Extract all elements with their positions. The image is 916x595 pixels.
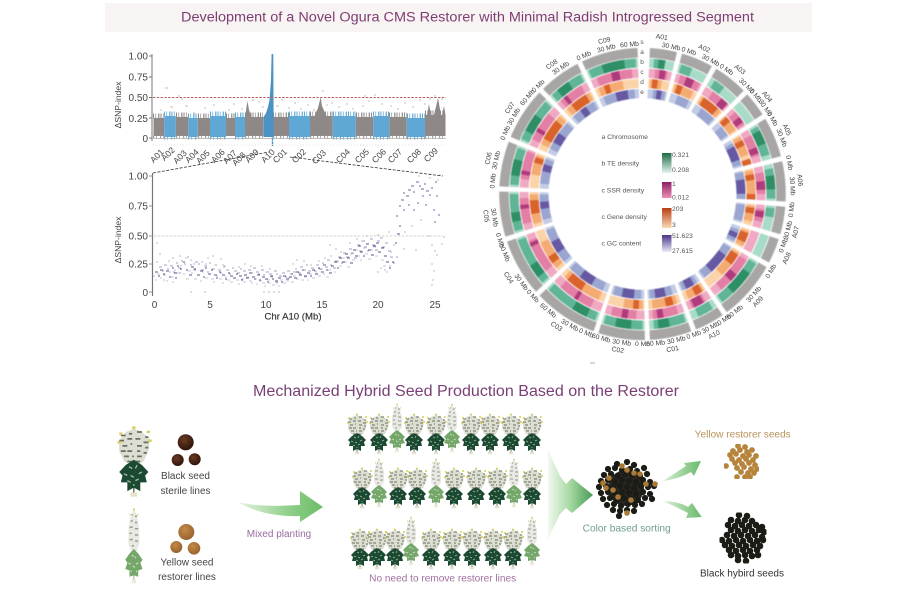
chromosome scale labels: 30 Mb <box>489 208 499 228</box>
track letters: s <box>640 39 644 46</box>
y axis title: ΔSNP-index <box>113 81 123 128</box>
chromosome scale labels: C06 <box>484 151 494 165</box>
chromosome labels: A03 <box>171 148 189 166</box>
chromosome scale labels: C08 <box>545 58 559 71</box>
chromosome labels: A08 <box>230 150 248 168</box>
chromosome scale labels: 30 Mb <box>745 285 763 304</box>
track letters: c <box>640 69 644 76</box>
icon: mixed seed pile <box>599 462 655 516</box>
label: black hybrid seeds: Black hybird seeds <box>700 569 784 580</box>
track a: chromosomes <box>504 53 781 335</box>
upper cluster points <box>396 182 440 222</box>
chromosome scale labels: 0 Mb <box>718 63 734 77</box>
track e: GC content <box>544 94 741 294</box>
x axis tick labels: 10 <box>260 300 272 311</box>
chromosome labels: C01 <box>271 147 289 165</box>
title band: Development of a Novel Ogura CMS Restorer with Minimal Radish Introgressed Segment <box>181 10 754 26</box>
chromosome scale labels: 0 Mb <box>525 289 540 305</box>
icon: sterile plant <box>118 428 152 495</box>
icon: yellow seeds <box>170 524 200 555</box>
chromosome labels: A04 <box>183 147 201 165</box>
y axis tick labels: 1.00 <box>129 52 148 62</box>
y axis tick labels: 1.00 <box>129 172 148 182</box>
circos colour scales: 1 <box>672 181 676 188</box>
chromosome gaps <box>524 73 762 315</box>
x axis tick labels: 20 <box>372 300 384 311</box>
x axis tick labels: 5 <box>207 300 213 311</box>
y axis tick labels: 0.50 <box>129 93 148 104</box>
chromosome scale labels: 30 Mb <box>788 177 796 196</box>
chromosome scale labels: 0 Mb <box>778 237 790 254</box>
blue chromosome bands <box>164 116 425 137</box>
chromosome scale labels: 30 Mb <box>596 43 617 55</box>
parent: black seed sterile line <box>118 428 211 497</box>
fuzzy band edges <box>153 113 445 116</box>
scattered outlier points <box>160 88 443 113</box>
light scatter points <box>156 175 445 292</box>
chromosome labels: A02 <box>159 145 177 163</box>
track c: SSR density <box>524 73 761 315</box>
chromosome scale labels: A01 <box>655 33 668 42</box>
chromosome scale labels: 30 Mb <box>491 150 502 170</box>
chromosome scale labels: 30 Mb <box>512 273 529 292</box>
circos track legend: a Chromosome <box>602 134 648 141</box>
chromosome scale labels: 0 Mb <box>500 125 512 142</box>
x axis title: Chr A10 (Mb) <box>264 312 322 322</box>
chromosome scale labels: 0 Mb <box>748 88 763 104</box>
y axis tick labels <box>129 52 148 145</box>
y axis tick labels: 0.50 <box>129 232 148 242</box>
label: color based sorting: Color based sorting <box>583 524 671 535</box>
chromosome scale labels: 30 Mb <box>506 107 522 127</box>
chromosome labels: C04 <box>334 147 352 165</box>
plant row 1 <box>347 404 543 453</box>
chromosome scale labels: 0 Mb <box>788 202 796 218</box>
y axis tick labels: 0 <box>142 134 148 145</box>
label: black seed sterile lines <box>160 471 211 497</box>
chromosome scale labels: 60 Mb <box>646 340 666 348</box>
icon: yellow seed pile <box>726 446 757 477</box>
track letters <box>640 39 644 96</box>
circos track legend: c SSR density <box>602 188 645 194</box>
chromosome scale labels: A09 <box>752 295 765 309</box>
chromosome scale labels: 0 Mb <box>494 232 505 249</box>
y axis tick labels <box>129 172 148 299</box>
chromosome scale labels: 0 Mb <box>531 79 547 94</box>
chromosome scale labels: A10 <box>707 329 722 341</box>
title band <box>105 3 812 32</box>
chromosome A10 SNP-index plot <box>113 172 445 322</box>
chromosome labels: A10 <box>259 147 277 165</box>
x axis tick labels: 0 <box>152 300 158 311</box>
icon: black seeds <box>172 434 201 466</box>
chromosome scale labels: 0 Mb <box>489 173 498 189</box>
chromosome scale labels: 0 Mb <box>578 327 595 340</box>
circos track legend: b TE density <box>602 160 640 168</box>
chromosome scale labels: 30 Mb <box>757 99 773 118</box>
circos track legend <box>602 134 648 248</box>
chromosome scale labels: 30 Mb <box>774 128 788 148</box>
field of mixed plants <box>347 404 543 568</box>
chromosome labels: C02 <box>290 147 308 165</box>
circos colour scales: 51.623 <box>672 233 693 240</box>
genome-wide SNP-index Manhattan plot <box>113 52 446 168</box>
chromosome scale labels: 30 Mb <box>612 338 632 348</box>
chromosome scale labels: 60 Mb <box>519 88 537 107</box>
label: yellow seed restorer lines: restorer lines <box>158 572 216 583</box>
circos colour scales: 0.012 <box>672 194 689 202</box>
chromosome scale labels: 0 Mb <box>716 313 733 327</box>
chromosome labels: A01 <box>148 147 166 165</box>
chromosome scale labels: 0 Mb <box>680 46 697 58</box>
chromosome scale labels: 30 Mb <box>551 60 571 77</box>
plant row 2 <box>352 459 543 507</box>
chromosome scale labels: 60 Mb <box>620 41 639 49</box>
chromosome scale labels: 60 Mb <box>497 243 511 263</box>
track letters: a <box>640 49 644 56</box>
circos colour scales: 0.321 <box>672 152 689 159</box>
y axis tick labels: 0 <box>142 288 148 299</box>
chromosome scale labels: C01 <box>666 345 680 354</box>
arrow: to yellow seeds <box>663 461 701 481</box>
arrow: to mixed planting <box>238 491 323 522</box>
chromosome labels: A07 <box>221 148 239 166</box>
chromosome scale labels: 30 Mb <box>737 77 756 96</box>
label: black seed sterile lines: Black seed <box>161 471 210 482</box>
chromosome scale labels: 0 Mb <box>576 50 593 63</box>
dark scatter points <box>152 226 401 286</box>
chromosome scale labels <box>481 33 803 355</box>
parent: yellow seed restorer line <box>125 509 216 583</box>
chromosome scale labels: C03 <box>549 321 563 333</box>
track d: gene density <box>534 83 751 305</box>
y axis tick labels: 0.25 <box>129 114 148 125</box>
chromosome labels: C09 <box>422 146 440 164</box>
y axis title: ΔSNP-index <box>113 216 123 263</box>
label: yellow restorer seeds: Yellow restorer seeds <box>695 430 791 441</box>
chromosome scale labels: 30 Mb <box>666 335 687 346</box>
track b: TE density <box>514 63 771 325</box>
chromosome scale labels: 0 Mb <box>765 111 779 128</box>
icon: restorer plant <box>125 509 143 581</box>
chromosome scale labels: A07 <box>791 225 801 239</box>
chromosome scale labels: 30 Mb <box>700 53 721 68</box>
A10 association peak <box>264 54 274 146</box>
circos genome plot <box>481 33 803 363</box>
plant row 3 <box>350 517 540 568</box>
threshold line <box>153 96 446 98</box>
concentric tracks <box>504 53 781 335</box>
x axis tick labels: 15 <box>316 300 328 311</box>
circos colour scales <box>662 152 693 255</box>
chromosome scale labels: C02 <box>611 346 625 355</box>
chromosome scale labels: C09 <box>598 36 612 46</box>
chromosome scale labels: 30 Mb <box>701 321 721 336</box>
chromosome scale labels: A06 <box>795 174 803 187</box>
chromosome scale labels: 30 Mb <box>661 42 681 53</box>
chromosome scale labels: C04 <box>502 271 514 285</box>
chromosome labels: C08 <box>405 147 423 165</box>
circos track legend: c Gene density <box>602 214 647 221</box>
chromosome scale labels: 0 Mb <box>784 155 794 171</box>
label: no need to remove restorer lines: No need to remove restorer lines <box>369 574 516 585</box>
chromosome scale labels: A05 <box>781 123 792 137</box>
chromosome scale labels: 60 Mb <box>591 333 611 345</box>
label: yellow seed restorer lines: Yellow seed <box>160 558 214 569</box>
chromosome scale labels: A03 <box>733 63 747 77</box>
chromosome scale labels: 30 Mb <box>560 318 580 333</box>
circos colour scales: 3 <box>672 222 676 229</box>
track letters: e <box>640 89 644 96</box>
chromosome scale labels: 0 Mb <box>765 263 779 280</box>
chromosome labels: A09 <box>243 147 261 165</box>
chromosome scale labels: 30 Mb <box>783 220 794 240</box>
label: black seed sterile lines: sterile lines <box>160 486 211 497</box>
gray chromosome bands <box>154 97 446 136</box>
chromosome scale labels: 0 Mb <box>635 341 650 348</box>
chromosome scale labels: A02 <box>697 43 711 55</box>
label: mixed planting: Mixed planting <box>247 529 311 540</box>
label: yellow seed restorer lines <box>158 558 216 583</box>
chromosome labels: C07 <box>386 147 404 165</box>
chromosome scale labels: 0 Mb <box>686 329 702 341</box>
circos colour scales: 27.615 <box>672 248 693 255</box>
chromosome scale labels: C05 <box>481 209 490 223</box>
chromosome scale labels: 60 Mb <box>726 304 745 321</box>
arrow: to colour sorting <box>548 450 593 539</box>
x axis tick labels: 25 <box>429 300 441 311</box>
chromosome labels: A05 <box>194 148 212 166</box>
section heading: seed production: Mechanized Hybrid Seed Production Based on the Restorer <box>253 383 679 400</box>
x axis tick labels <box>152 300 441 311</box>
icon: black seed pile <box>722 515 764 561</box>
chromosome labels: C06 <box>370 147 388 165</box>
circos colour scales: 0.208 <box>672 167 689 174</box>
chromosome labels <box>148 145 440 168</box>
y axis tick labels: 0.75 <box>129 202 148 212</box>
0.50 threshold <box>154 235 443 237</box>
circos colour scales: 203 <box>672 206 684 213</box>
chromosome scale labels: A08 <box>782 251 793 265</box>
track letters: b <box>640 59 644 66</box>
chromosome labels: C03 <box>310 148 328 166</box>
chromosome scale labels: 60 Mb <box>538 302 558 320</box>
chromosome scale labels: C07 <box>504 101 517 115</box>
chromosome scale labels: A04 <box>760 90 773 104</box>
arrow: to black seeds <box>664 501 702 518</box>
y axis tick labels: 0.25 <box>129 260 148 270</box>
chromosome labels: C05 <box>353 147 371 165</box>
circos track legend: c GC content <box>602 240 641 248</box>
zoom connector lines <box>153 152 443 176</box>
track letters: d <box>640 79 644 86</box>
y axis tick labels: 0.75 <box>129 72 148 84</box>
chromosome labels: A06 <box>209 147 227 165</box>
